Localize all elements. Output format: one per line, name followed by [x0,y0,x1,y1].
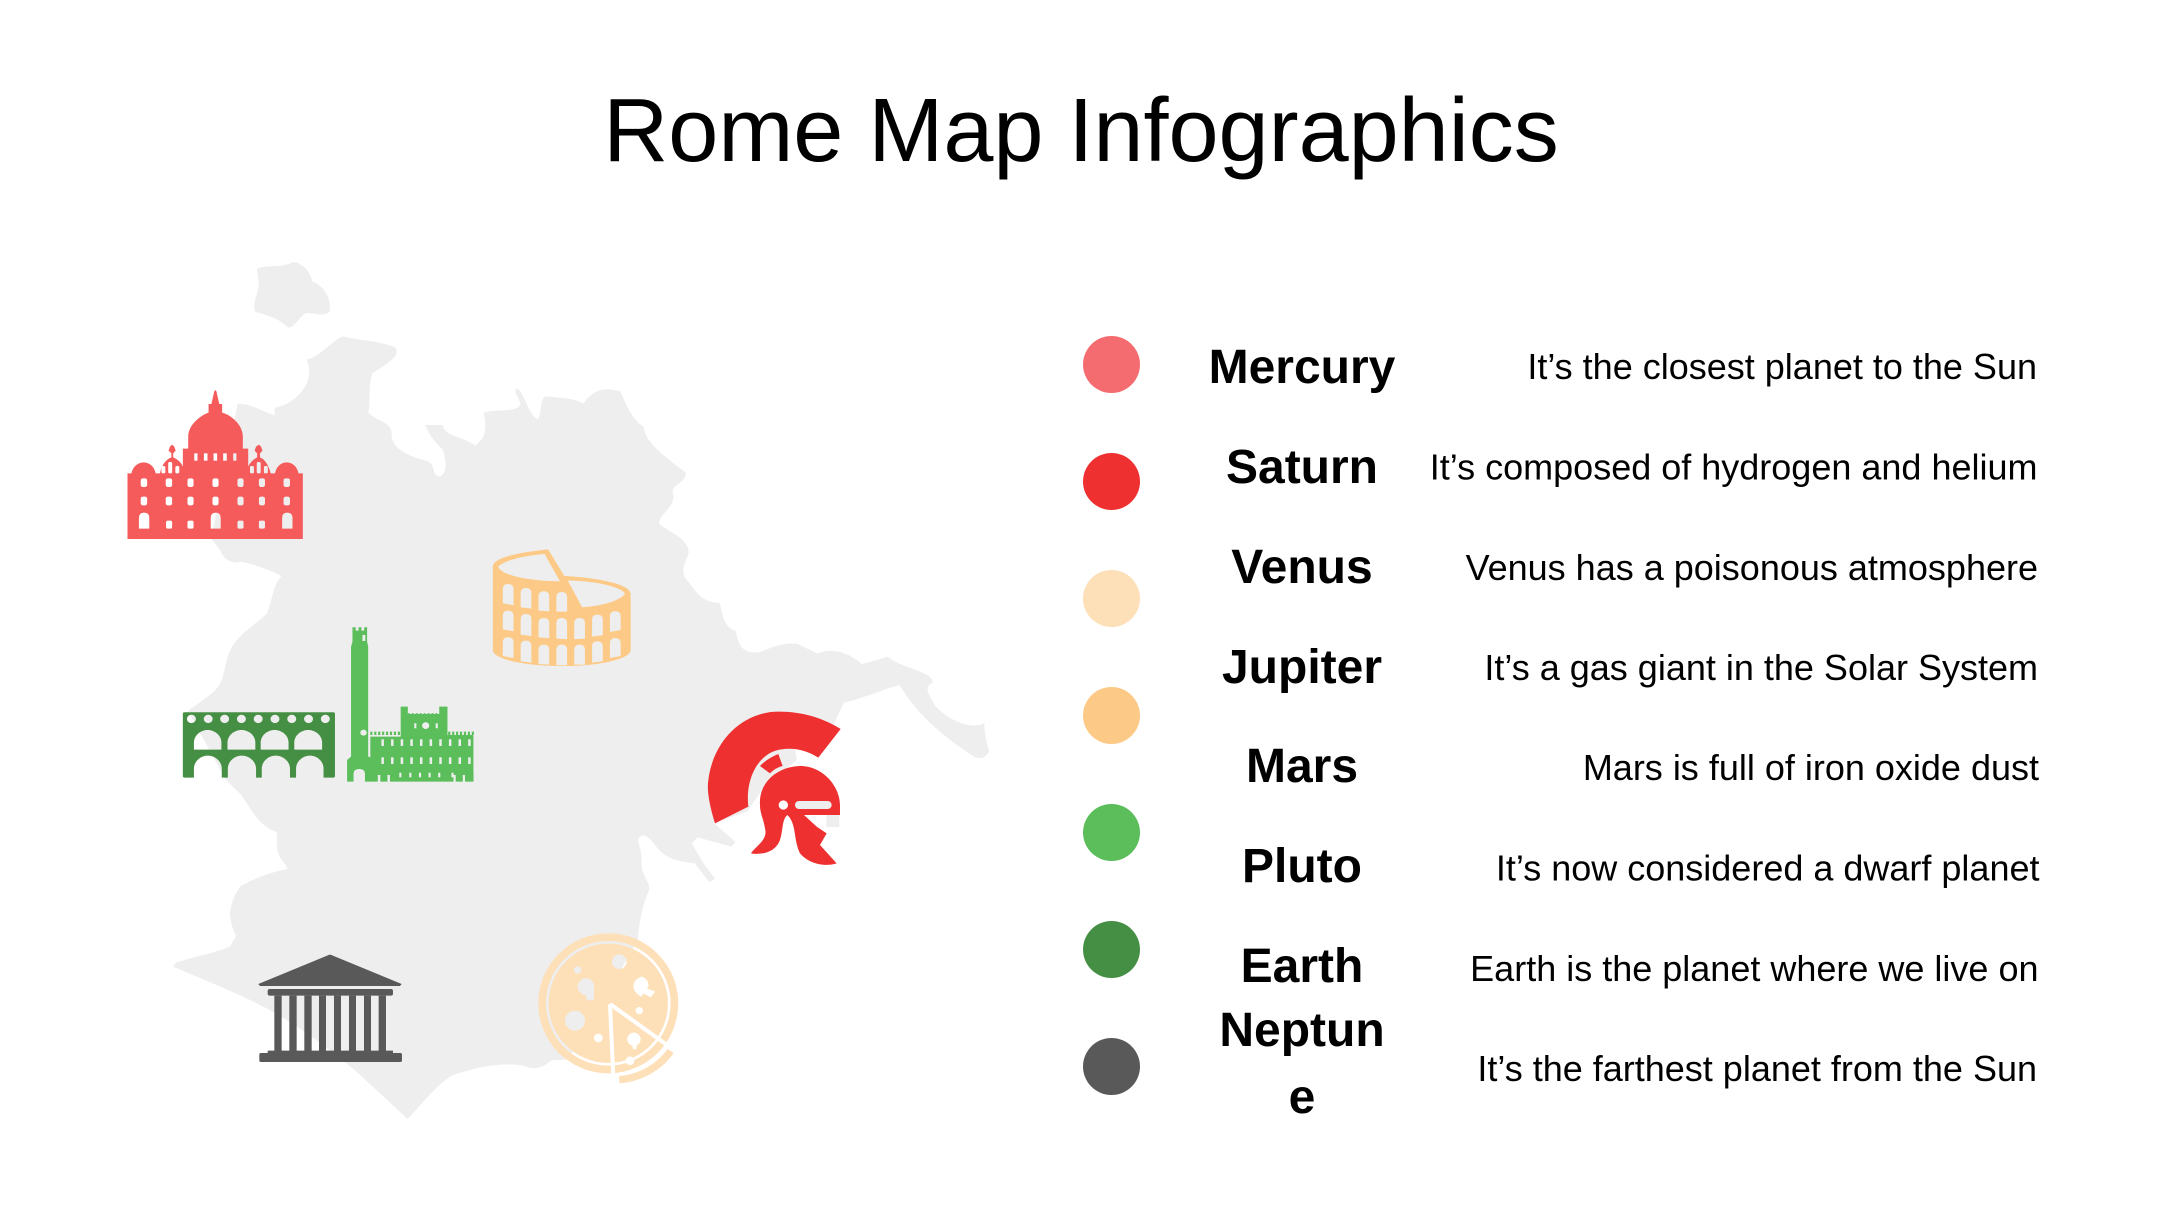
icon: aqueduct [183,712,335,778]
dot: Mercury [1083,336,1140,393]
name: Venus: Venus [1231,541,1373,594]
name: Earth: Earth [1241,940,1363,993]
dot: Neptune [1083,1038,1140,1095]
temple base [259,1051,402,1062]
crest ornament [760,754,783,773]
temple columns [274,996,386,1052]
dot: Pluto [1083,921,1140,978]
description: Earth: Earth is the planet where we live on [1470,948,2038,989]
dot: Saturn [1083,453,1140,510]
legend colour dots [1083,336,1140,1095]
dot: Mars [1083,804,1140,861]
title: Rome Map Infographics [603,81,1559,181]
name: Jupiter: Jupiter [1222,641,1382,694]
description: Mercury: It’s the closest planet to the Sun [1527,346,2037,387]
helmet body [751,766,840,865]
small map patch beside helmet [826,814,839,827]
northern lake shape [254,262,330,327]
legend descriptions [1430,346,2040,1089]
icon: tower and palazzo [347,627,474,782]
pizza disc and crust [538,933,678,1073]
description: Mars: Mars is full of iron oxide dust [1583,747,2039,788]
description: Jupiter: It’s a gas giant in the Solar System [1484,647,2038,688]
name: Neptune: e [1289,1071,1315,1124]
name: Pluto: Pluto [1242,840,1362,893]
icon: pizza [538,933,678,1080]
name: Neptune: Neptun [1219,1004,1385,1057]
description: Saturn: It’s composed of hydrogen and helium [1430,446,2038,488]
icon: temple [258,955,402,1062]
map of Rome region [173,262,989,1119]
temple roof [258,955,402,986]
description: Neptune: It’s the farthest planet from the Sun [1477,1048,2037,1089]
description: Pluto: It’s now considered a dwarf planet [1496,848,2040,888]
temple entablature [268,989,393,996]
legend planet names [1209,341,1396,1124]
name: Saturn: Saturn [1226,441,1378,494]
dot: Jupiter [1083,687,1140,744]
name: Mars: Mars [1246,740,1358,793]
helmet crest [708,712,841,823]
dot: Venus [1083,570,1140,627]
icon: Colosseum [493,549,631,666]
icon: Roman helmet [708,712,841,865]
description: Venus: Venus has a poisonous atmosphere [1466,547,2038,588]
name: Mercury: Mercury [1209,341,1396,394]
helmet eye [779,800,788,810]
helmet visor slit [795,801,832,809]
main land shape [173,336,989,1119]
icon: St Peter's basilica [127,390,303,539]
pizza slice crust [619,1051,671,1080]
